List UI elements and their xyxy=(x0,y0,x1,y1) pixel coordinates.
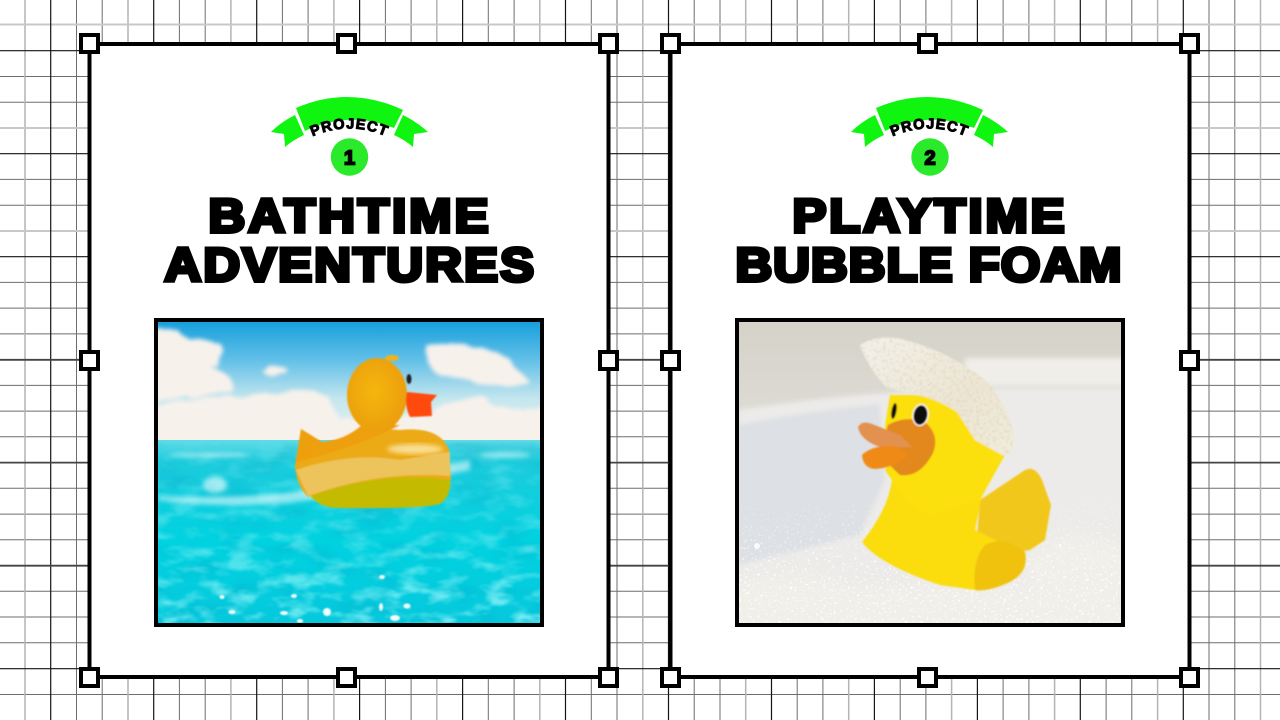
heading: Playtime Bubble Foam xyxy=(735,191,1121,292)
light glints on ring xyxy=(387,444,443,454)
water light xyxy=(158,452,530,505)
large bubbles xyxy=(754,543,1076,616)
water texture xyxy=(168,442,540,592)
badge: project 2 ribbon xyxy=(851,97,1008,176)
heading: Bathtime Adventures xyxy=(164,191,534,292)
panel 1 frame with selection handles xyxy=(81,35,617,686)
clouds xyxy=(158,325,540,440)
tub xyxy=(739,357,1121,562)
badge: project 1 ribbon xyxy=(271,97,428,176)
panel: project 2 xyxy=(660,33,1200,688)
badge: project 2 ribbon: PROJECT xyxy=(889,118,970,136)
badge: project 2 ribbon: 2 xyxy=(924,148,936,170)
panel 2 frame with selection handles xyxy=(662,35,1198,686)
image: rubber duck with foam hat xyxy=(735,318,1125,627)
foam bath bubbles xyxy=(739,515,1121,623)
heading: Playtime Bubble Foam: PLAYTIME xyxy=(793,191,1065,243)
badge: project 1 ribbon: 1 xyxy=(344,148,355,170)
panel: project 1 xyxy=(79,33,619,688)
badge: project 1 ribbon: PROJECT xyxy=(309,118,390,136)
duck xyxy=(858,337,1051,590)
foam hat texture xyxy=(862,338,1013,454)
heading: Bathtime Adventures: ADVENTURES xyxy=(164,240,534,292)
duck xyxy=(295,355,451,508)
image: rubber duck floating at sea xyxy=(150,320,550,625)
sun sparkles xyxy=(220,575,410,623)
heading: Bathtime Adventures: BATHTIME xyxy=(209,191,489,243)
heading: Playtime Bubble Foam: BUBBLE FOAM xyxy=(735,240,1121,292)
